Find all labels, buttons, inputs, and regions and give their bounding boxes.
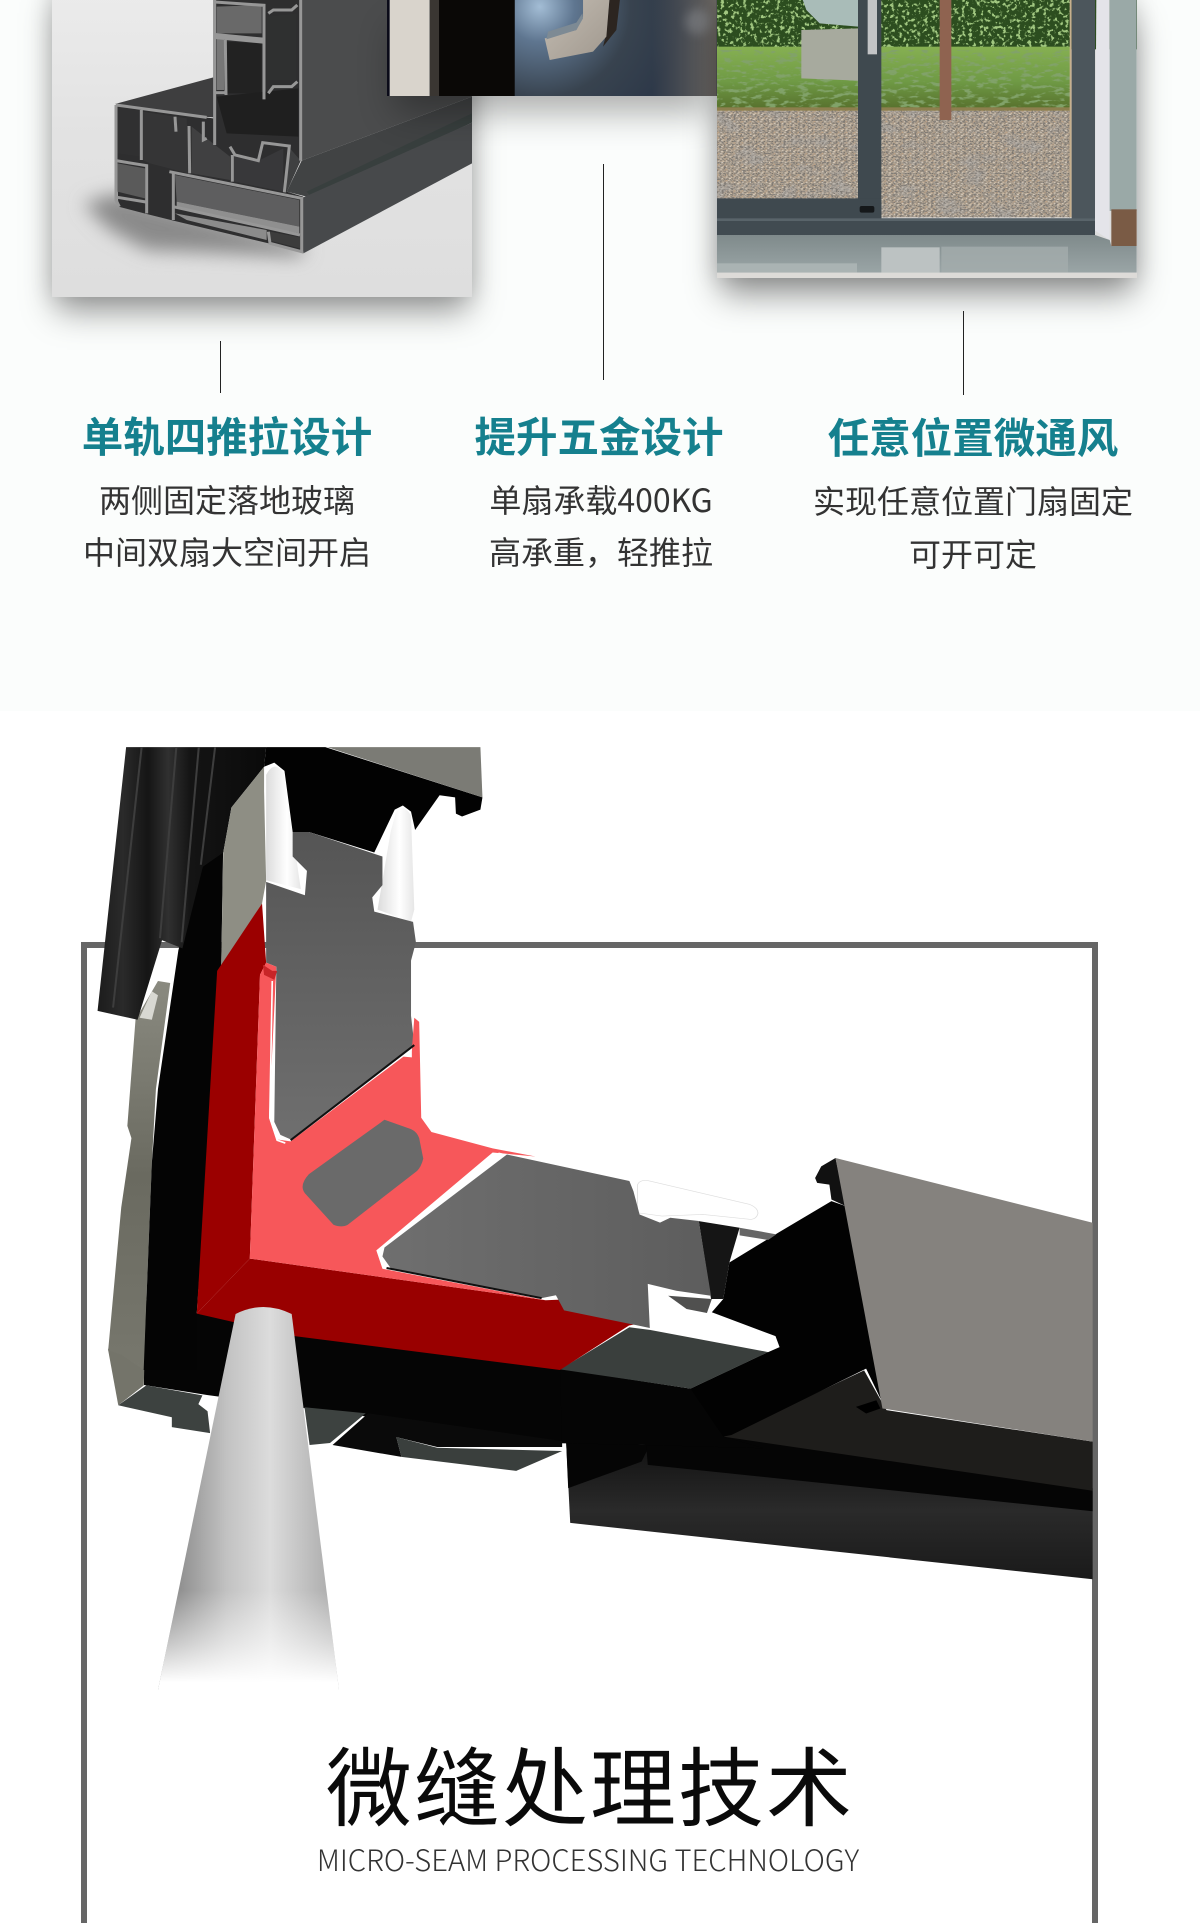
under clip	[668, 1296, 712, 1313]
red dark left face	[197, 903, 266, 1314]
description line 2: 高承重，轻推拉	[489, 528, 713, 574]
outlined frame	[81, 942, 1098, 1923]
dark top face	[723, 1370, 1093, 1491]
upper section background	[0, 0, 1200, 711]
ribbed dark rail	[98, 747, 266, 1020]
left lower gray profile	[108, 981, 170, 1370]
white gap lines	[270, 981, 285, 1143]
white tab	[638, 1180, 758, 1219]
upper dark plate	[266, 832, 416, 1139]
description line 2: 中间双扇大空间开启	[83, 528, 371, 574]
slot detail	[699, 1221, 740, 1299]
top black housing	[264, 747, 482, 852]
top gray face	[327, 747, 482, 797]
panel: door handle photo	[387, 0, 717, 96]
english subtitle: MICRO-SEAM PROCESSING TECHNOLOGY	[317, 1838, 859, 1880]
description line 1: 实现任意位置门扇固定	[813, 477, 1133, 523]
red dark bottom face	[197, 1259, 648, 1370]
description line 1: 单扇承载400KG	[489, 476, 713, 522]
right white tooth	[378, 808, 414, 922]
black vertical	[144, 840, 223, 1370]
heading: 提升五金设计	[474, 404, 724, 464]
panel: aluminium profile photo	[52, 0, 472, 297]
panel: sliding door photo	[717, 0, 1137, 278]
black base band	[144, 1300, 562, 1443]
left white tooth	[266, 767, 301, 889]
connector line: column 3	[963, 311, 964, 395]
description line 1: 两侧固定落地玻璃	[99, 476, 355, 522]
red corner and vertical part	[98, 747, 711, 1370]
right rail parts	[560, 1158, 1093, 1579]
black band	[560, 1352, 768, 1448]
description line 2: 可开可定	[909, 530, 1037, 576]
foot pieces	[108, 1300, 562, 1471]
cap lip	[815, 1158, 846, 1206]
upper gray face	[221, 767, 266, 967]
feature block: micro ventilation	[813, 405, 1133, 576]
nozzle cone	[158, 1307, 339, 1690]
heading: 任意位置微通风	[828, 405, 1118, 465]
connector line: column 1	[220, 341, 221, 393]
black end face	[691, 1201, 884, 1437]
gray cover face	[836, 1158, 1093, 1442]
connector line: column 2	[603, 164, 604, 380]
title: 微缝处理技术	[326, 1719, 854, 1844]
heading: 单轨四推拉设计	[82, 404, 372, 464]
center gray slot	[303, 1120, 423, 1226]
red light top face	[250, 963, 546, 1300]
feature block: lift hardware	[474, 404, 724, 574]
lower rail	[566, 1442, 1093, 1579]
gray cap block	[560, 1327, 768, 1389]
lower dark plate	[382, 1154, 711, 1328]
feature block: single track	[82, 404, 372, 574]
